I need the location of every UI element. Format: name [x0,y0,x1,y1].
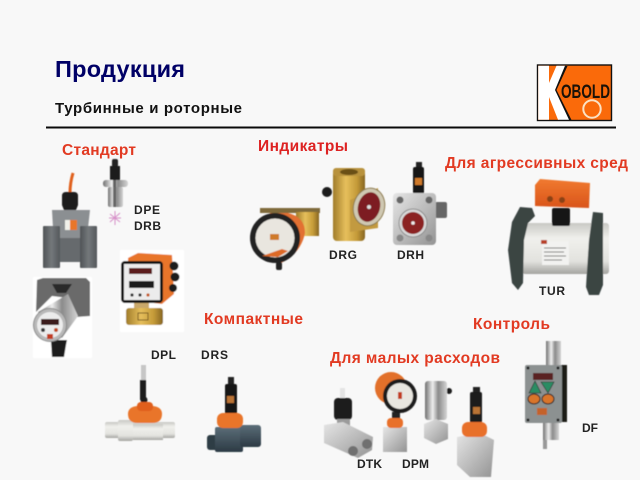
device: digital display meter [120,250,184,332]
subtitle: Турбинные и роторные [55,100,242,117]
section heading: compact: Компактные [204,311,303,328]
device: gray turbine meter [43,173,97,268]
device: DRS dark compact sensor [207,377,261,452]
model label: DRS: DRS [201,348,228,362]
device: DPE sensor [103,159,128,225]
section heading: standard: Стандарт [62,142,136,159]
model label: DPM: DPM [402,457,429,471]
section heading: low flow: Для малых расходов [330,350,500,367]
device: DPL white compact sensor [105,365,175,441]
model label: DRB: DRB [134,219,161,233]
device: tall low flow sensor [457,387,494,477]
device: round gauge indicator [250,208,320,270]
logo: Kobold [538,65,612,120]
device: DTK low flow sensor [324,388,373,458]
device: DF control unit [525,341,567,449]
model label: DTK: DTK [357,457,382,471]
device: silver low flow sensor [424,381,452,444]
device: DRG brass indicator [322,168,389,241]
model label: DF: DF [582,421,598,435]
model label: TUR: TUR [539,284,565,298]
section heading: control: Контроль [473,316,550,333]
device: TUR electromagnetic meter [508,179,609,295]
model label: DRH: DRH [397,248,424,262]
device: DRH indicator [393,162,447,245]
title: Продукция [55,56,185,82]
model label: DPE: DPE [134,203,160,217]
device: DPM gauge [375,372,417,452]
model label: DPL: DPL [151,348,176,362]
logo: Kobold: OBOLD [561,81,610,103]
device: silver display sensor [33,277,92,358]
model label: DRG: DRG [329,248,357,262]
section heading: aggressive media: Для агрессивных сред [445,155,628,172]
section heading: indicators: Индикатры [258,138,348,155]
